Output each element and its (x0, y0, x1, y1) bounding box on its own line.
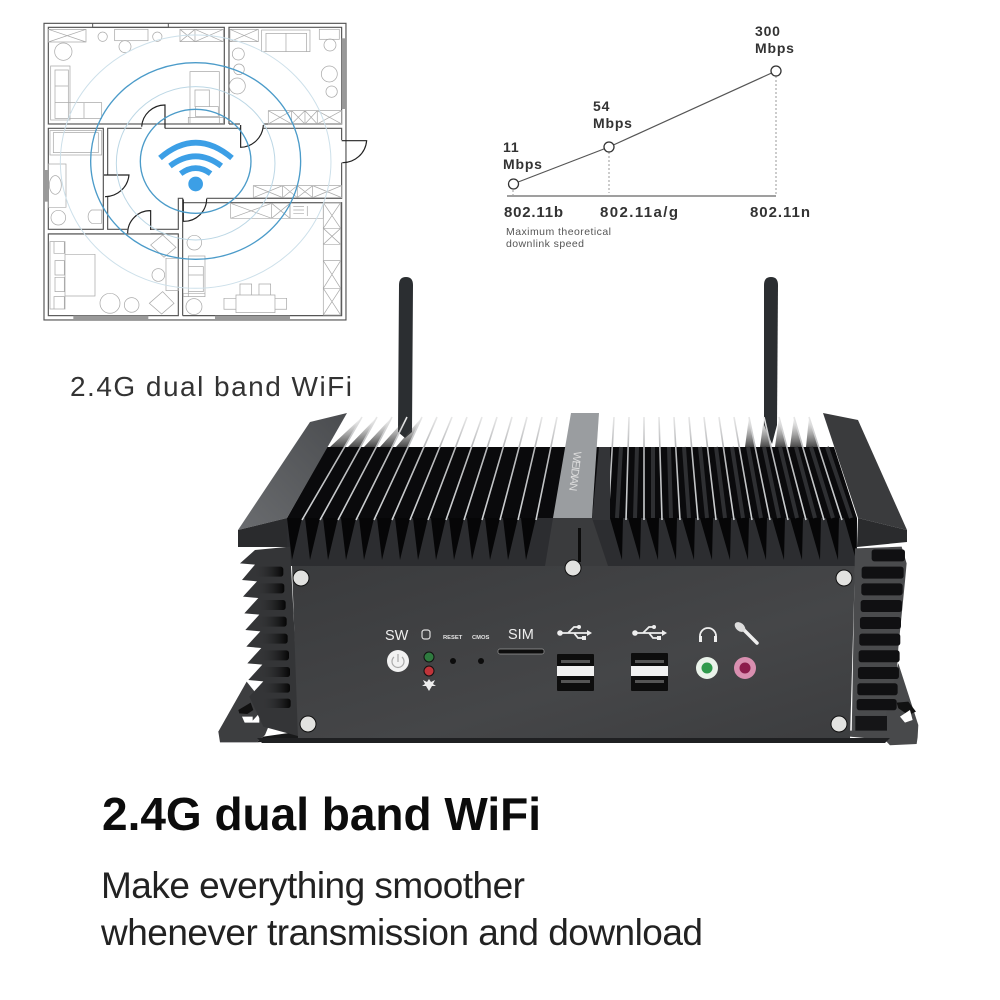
panel screws (293, 560, 852, 732)
floor plan with wifi coverage (44, 23, 367, 320)
upper fin shading (330, 417, 818, 447)
fin shadow wedges (287, 518, 857, 560)
speed labels: Mbps (755, 40, 795, 56)
fin bank (287, 417, 857, 566)
description text: Make everything smoother (101, 865, 525, 906)
right mounting foot (850, 663, 918, 745)
icon: wifi symbol (160, 143, 232, 191)
chart note: downlink speed (506, 238, 584, 250)
left top ridge (238, 413, 347, 547)
speed labels: 54 (593, 98, 610, 114)
power switch: SW (385, 628, 409, 644)
standard labels: 802.11b (504, 204, 563, 221)
wifi caption: 2.4G dual band WiFi (70, 371, 352, 402)
standard labels: 802.11n (750, 204, 810, 221)
speed labels: 11 (503, 139, 519, 155)
speed labels (503, 23, 795, 172)
window strips (44, 38, 346, 320)
bottom shadow strip (257, 738, 890, 743)
furniture outlines (48, 29, 342, 315)
left side cooling fins (240, 547, 300, 737)
main heading: 2.4G dual band WiFi (102, 788, 541, 840)
door swings (104, 105, 367, 233)
right top ridge (823, 413, 907, 547)
sim slot (498, 627, 544, 654)
antennas (398, 277, 778, 444)
line chart: wifi standard speeds (503, 23, 810, 250)
speed labels: 300 (755, 23, 781, 39)
mic jack (733, 620, 757, 679)
reset and cmos holes: RESET (443, 635, 463, 641)
usb ports right (631, 625, 668, 691)
sim slot: SIM (508, 627, 534, 643)
standard labels: 802.11a/g (600, 204, 678, 221)
standard labels (504, 204, 810, 221)
mini pc device (218, 277, 918, 745)
audio out jack (696, 628, 718, 679)
center brand bar (545, 413, 610, 566)
right side cooling fins and foot (850, 547, 918, 745)
description text: whenever transmission and download (100, 912, 703, 953)
speed labels: Mbps (593, 115, 633, 131)
wifi range rings (60, 35, 331, 288)
usb ports left (557, 625, 594, 691)
data points (508, 66, 781, 189)
reset and cmos holes: CMOS (472, 635, 490, 641)
power switch (385, 628, 409, 672)
description text (100, 865, 703, 953)
status LEDs (422, 630, 436, 691)
center brand bar: WEIDIAN (566, 451, 583, 492)
right fin side faces (617, 447, 851, 518)
left mounting foot (218, 682, 299, 742)
floor plan walls (44, 23, 346, 320)
axis and dashed guides (507, 71, 776, 196)
chart note: Maximum theoretical (506, 226, 611, 238)
fin highlights (302, 417, 842, 520)
chart note (506, 226, 611, 250)
reset and cmos holes (443, 635, 490, 664)
speed labels: Mbps (503, 156, 543, 172)
front panel (292, 566, 855, 738)
